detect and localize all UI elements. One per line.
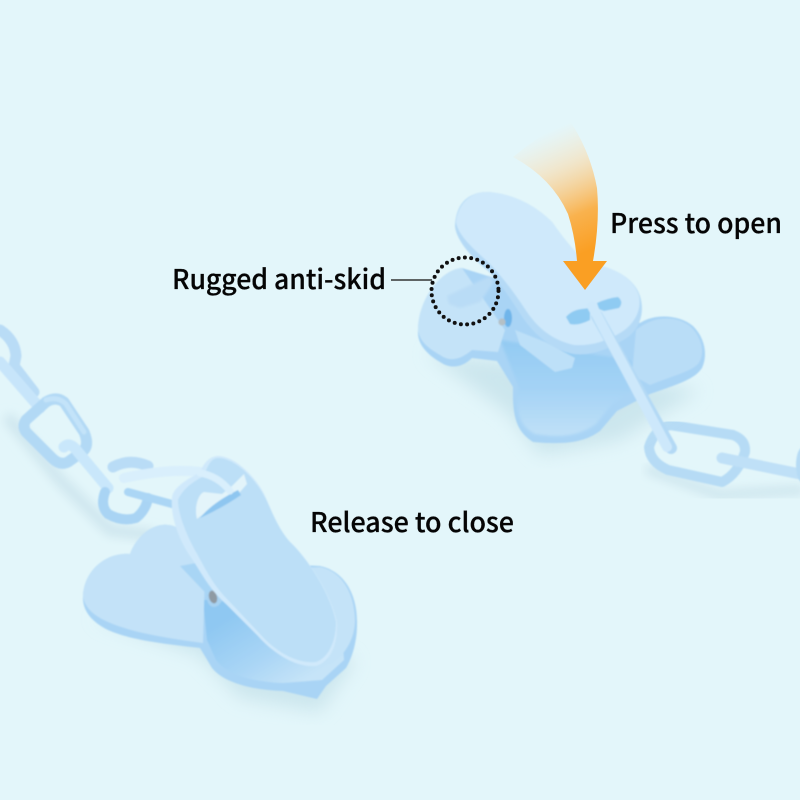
next link xyxy=(64,445,108,488)
base upper-right lobe xyxy=(300,567,355,665)
base plate edge xyxy=(83,525,357,699)
base plate edge xyxy=(418,268,705,443)
label: rugged anti-skid: Rugged anti-skid xyxy=(172,258,386,297)
upper link xyxy=(113,462,148,467)
spring hinge xyxy=(515,330,575,372)
top lever edge xyxy=(455,192,642,354)
chain pin edge xyxy=(597,316,671,448)
lower link xyxy=(103,492,148,519)
shadow xyxy=(90,618,355,712)
anti-skid grip xyxy=(447,276,494,308)
base lower lobe xyxy=(203,600,344,683)
strand to clip xyxy=(128,492,172,504)
lever hole shade xyxy=(200,490,241,518)
large link highlight xyxy=(46,399,84,432)
top lever xyxy=(178,458,336,662)
left lobe xyxy=(418,268,505,359)
right lobe xyxy=(632,318,702,385)
edge link xyxy=(796,447,800,483)
rivet xyxy=(207,589,221,607)
label: release to close: Release to close xyxy=(310,501,514,540)
next link xyxy=(722,458,800,474)
callout leader line xyxy=(391,279,432,281)
base left lobes xyxy=(83,525,205,643)
right chain links xyxy=(649,425,800,495)
oval link xyxy=(649,425,745,482)
strand off the edge xyxy=(0,362,40,408)
chain shadow xyxy=(10,420,150,535)
light link xyxy=(124,471,200,478)
lever side edge xyxy=(172,456,337,666)
right clip xyxy=(418,192,705,455)
top-left link xyxy=(0,330,34,392)
link shadow xyxy=(650,470,800,495)
chain pin xyxy=(592,306,667,447)
hinge xyxy=(180,563,226,606)
base body xyxy=(500,340,640,436)
label: press to open: Press to open xyxy=(610,202,782,241)
lever hole xyxy=(196,474,247,519)
top lever face xyxy=(456,192,640,345)
lever slots xyxy=(566,297,621,324)
large link xyxy=(24,399,87,463)
left chain xyxy=(0,330,222,535)
callout: dotted circle xyxy=(432,258,498,324)
link over lever xyxy=(200,473,230,491)
shadow xyxy=(425,352,700,455)
arrow: press down xyxy=(513,118,607,290)
left clip xyxy=(83,456,357,712)
back of light link xyxy=(200,492,222,496)
rivet xyxy=(498,309,512,327)
